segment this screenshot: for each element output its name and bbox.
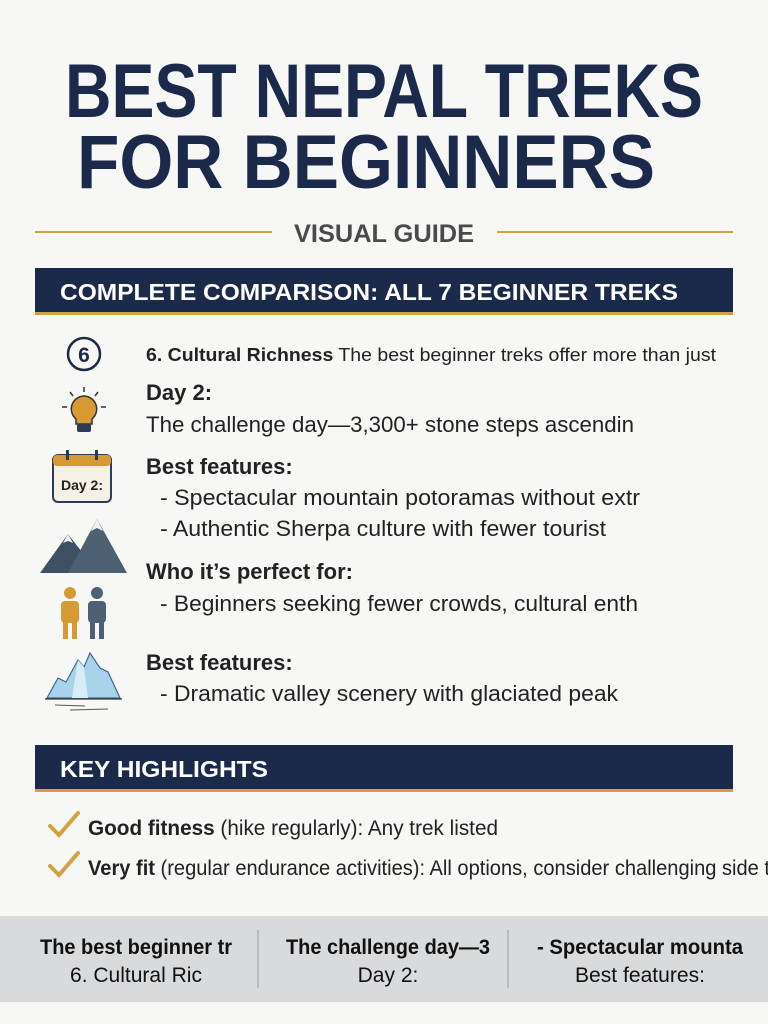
title [65,49,703,205]
text: who it's perfect for: Who it’s perfect for: [146,559,353,584]
footer summary band: The challenge day—3 [286,936,490,959]
icon: people [61,587,106,639]
title: FOR BEGINNERS [77,120,655,205]
text: best features 1 [146,454,640,541]
text: best features 2 [146,650,619,706]
footer summary band: 6. Cultural Ric [70,964,202,987]
text: who it's perfect for: - Beginners seeking fewer crowds, cultural enth [160,591,638,616]
icon: light bulb [62,387,106,432]
icon: calendar: Day 2: [61,477,103,493]
section header: complete comparison: COMPLETE COMPARISON: ALL 7 BEGINNER TREKS [60,279,678,305]
text: day 2: Day 2: [146,380,212,405]
icon: mountains [40,519,127,573]
text: best features 2: - Dramatic valley scenery with glaciated peak [160,681,619,706]
footer summary band: Day 2: [358,964,418,987]
footer summary band: - Spectacular mounta [537,936,743,959]
icon: calendar [53,450,111,502]
text: day 2: The challenge day—3,300+ stone steps ascendin [146,412,634,437]
footer summary band [0,916,768,1002]
text: best features 1: - Spectacular mountain potoramas without extr [160,485,640,510]
footer summary band: The best beginner tr [40,936,232,959]
highlight: good fitness: Good fitness (hike regularly): Any trek listed [88,817,498,840]
icon: number 6 [68,338,100,370]
footer summary band: Best features: [575,964,705,987]
text: best features 2: Best features: [146,650,293,675]
text: best features 1: Best features: [146,454,293,479]
section header: key highlights: KEY HIGHLIGHTS [60,756,268,782]
section header: key highlights [35,745,733,792]
icon: iceberg [45,653,122,710]
text: best features 1: - Authentic Sherpa culture with fewer tourist [160,516,606,541]
subtitle: visual guide: VISUAL GUIDE [294,220,474,248]
section header: complete comparison [35,268,733,315]
text: day 2 [146,380,634,437]
text: cultural richness: 6. Cultural Richness The best beginner treks offer more than just [146,345,716,365]
icon: number 6: 6 [78,344,90,367]
text: who it's perfect for [146,559,638,616]
